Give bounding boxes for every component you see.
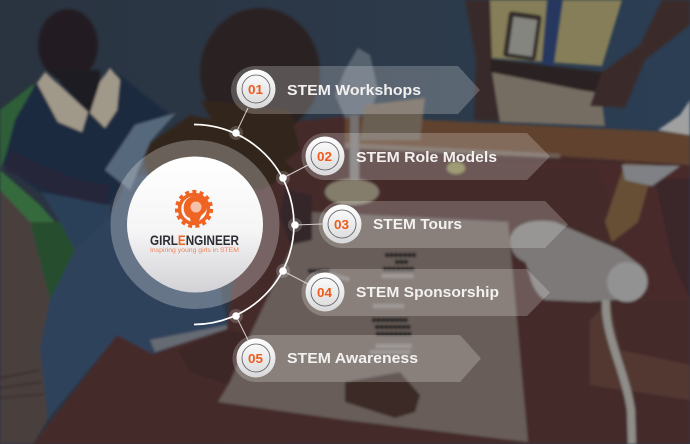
wood plank	[345, 116, 690, 165]
item 04: STEM Sponsorship	[302, 269, 550, 316]
item 03: STEM Tours	[318, 201, 568, 248]
connector arc	[194, 108, 322, 340]
logo wordmark: GIRLENGINEER	[150, 233, 239, 248]
central child	[40, 175, 227, 419]
logo tagline: Inspiring young girls in STEM	[150, 247, 239, 254]
item 02: STEM Role Models: 02	[317, 150, 332, 164]
item 03: STEM Tours: STEM Tours	[373, 216, 462, 233]
item 01: STEM Workshops: 01	[248, 83, 263, 97]
item 02: STEM Role Models	[302, 133, 550, 180]
white cloth	[658, 100, 690, 135]
beads	[310, 255, 415, 352]
paper	[218, 212, 528, 442]
item 01: STEM Workshops	[231, 66, 480, 114]
arc nodes	[229, 126, 302, 323]
left child	[40, 190, 110, 250]
item 01: STEM Workshops: STEM Workshops	[287, 82, 421, 99]
wooden post and lower frame	[605, 163, 654, 242]
item 05: STEM Awareness	[233, 335, 481, 382]
item 05: STEM Awareness: STEM Awareness	[287, 350, 418, 367]
lamp	[335, 48, 378, 118]
central logo badge	[110, 140, 280, 309]
hair dryer	[510, 221, 648, 302]
item 02: STEM Role Models: STEM Role Models	[356, 149, 497, 166]
left child chair	[0, 83, 35, 170]
standing person	[465, 0, 510, 122]
item 04: STEM Sponsorship: 04	[317, 286, 332, 300]
item 03: STEM Tours: 03	[334, 218, 349, 232]
icon: gear with head and light bulb	[177, 192, 211, 226]
ground	[0, 190, 50, 444]
item 05: STEM Awareness: 05	[248, 352, 263, 366]
table	[33, 116, 690, 444]
forearm and hand	[178, 330, 420, 418]
item 04: STEM Sponsorship: STEM Sponsorship	[356, 284, 499, 301]
